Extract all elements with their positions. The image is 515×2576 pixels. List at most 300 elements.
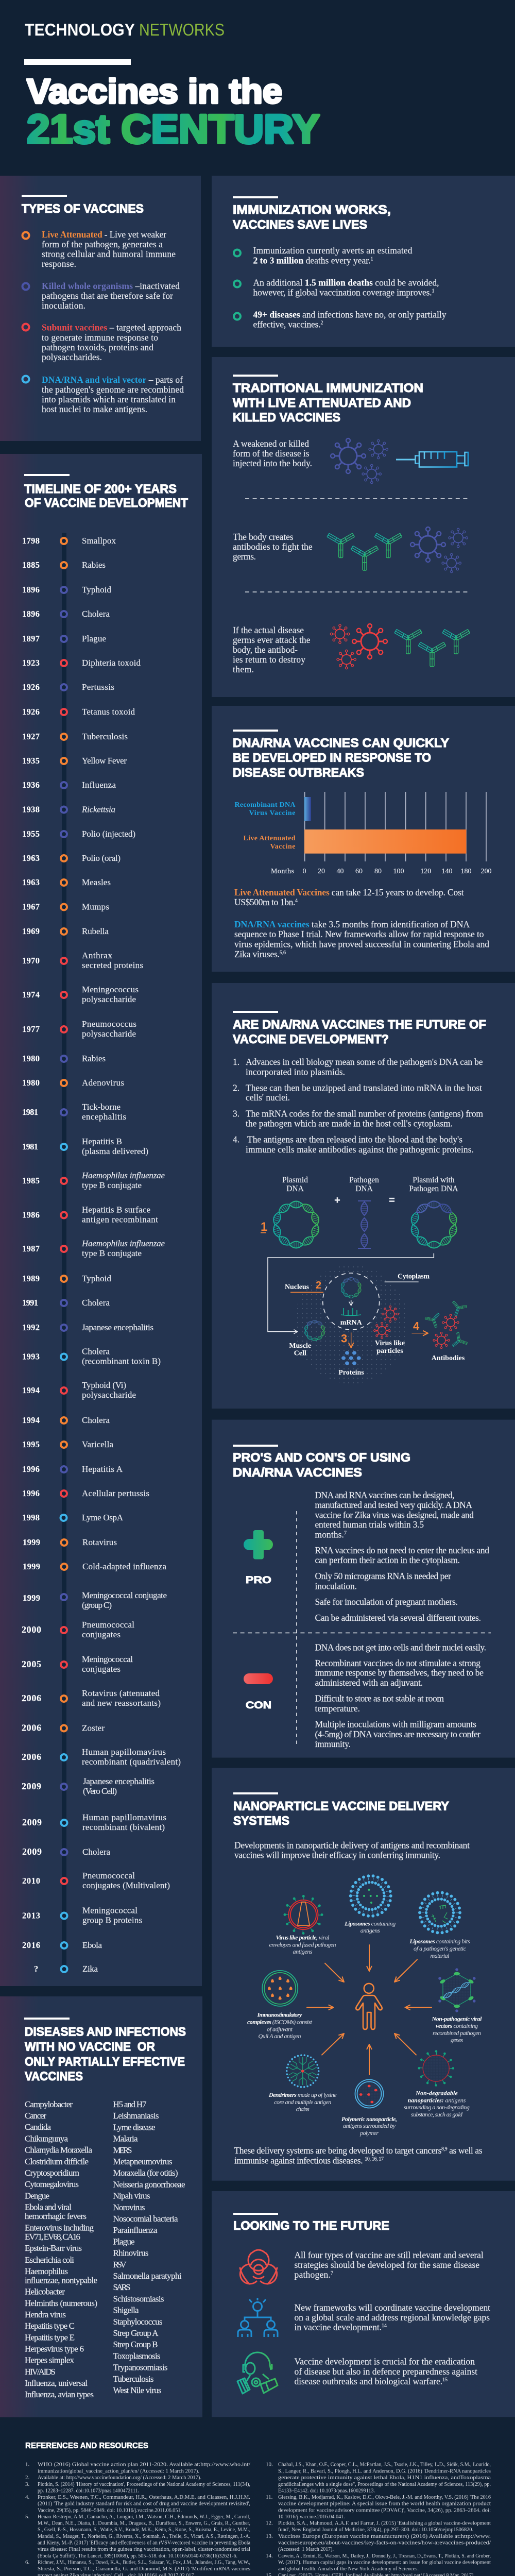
cons list: (4-5mg) of DNA vaccines are necessary to confer: [315, 1729, 480, 1739]
caption: non-degradable: [404, 2090, 470, 2118]
row zika: [34, 1964, 98, 1974]
references: left column: Henao-Restrepo, A.M., Camacho, A., Longini, I.M., Watson, C.H., Edmunds, W.J., Egger, M., Carroll,: [38, 2514, 250, 2520]
row 1981 tick-borne: 1981: [22, 1107, 38, 1117]
disease list: left column: Cancer: [25, 2111, 46, 2121]
disease list: right column: Plague: [113, 2236, 135, 2246]
disease list: left column: Helminths (numerous): [25, 2298, 97, 2308]
row 1970: secreted proteins: [82, 960, 143, 970]
subunit vaccines: Subunit vaccines – targeted approach: [42, 323, 181, 333]
title: [27, 72, 320, 151]
bar labels: Virus Vaccine: [249, 809, 296, 817]
horizontal divider: [233, 1632, 491, 1633]
axis labels: 80: [374, 868, 382, 875]
divider 1: [245, 498, 470, 499]
pros list: vaccine for Zika virus was designed, made and: [315, 1510, 474, 1520]
row 2010: Pneumococcal: [82, 1871, 135, 1880]
row 2009 hpv: [22, 1812, 166, 1832]
row 1980 rabies: [22, 1054, 106, 1063]
row 1955: Polio (injected): [82, 829, 135, 839]
references: left column: Plotkin, S. (2014) 'History of vaccination', Proceedings of the National Academy of Sciences, 111(34),: [38, 2481, 250, 2487]
row 1980 adenovirus: Adenovirus: [82, 1078, 124, 1088]
diagram: plasmid with pathogen dna: Plasmid with: [413, 1176, 455, 1184]
disease list: left column: EV71, EV68, CA16: [25, 2232, 80, 2242]
row 1897: 1897: [22, 634, 40, 643]
row 1955: [22, 829, 135, 839]
dna rna and viral vector: into plasmids which are translated in: [42, 394, 176, 404]
references: right column: vaccine development pipeline: A special issue from the world health organization product: [278, 2501, 491, 2507]
caption: iscom: Immunostimulatory: [256, 2011, 302, 2019]
row 1923: Diphteria toxoid: [82, 658, 141, 668]
row 1926 pertussis: 1926: [22, 682, 40, 692]
intro text: Developments in nanoparticle delivery of antigens and recombinant: [234, 1840, 470, 1851]
row 1986: 1986: [22, 1210, 40, 1220]
antibodies binding viruses: [424, 1299, 470, 1362]
fact: lives saved: Immunization currently averts an estimated: [253, 245, 413, 256]
heading: diseases: WITH NO VACCINE OR: [25, 2040, 155, 2054]
axis labels: 180: [460, 868, 472, 875]
row 2005: conjugates: [82, 1664, 121, 1674]
row 1991: 1991: [22, 1298, 38, 1308]
row 1992: [22, 1323, 153, 1332]
title: 21st CENTURY: [27, 106, 320, 151]
caption: liposome genetic: Liposomes containing bits: [409, 1938, 470, 1945]
references: right column: Plotkin, S.A., Mahmoud, A.A.F. and Farrar, J. (2015) 'Estalishing a global vaccine-development: [278, 2520, 491, 2527]
row 1996 pertussis: [22, 1488, 149, 1498]
diagram: plasmid dna: Plasmid: [282, 1176, 308, 1184]
diagram: plasmid dna: [272, 1176, 320, 1248]
text: vaccine development crucial: of disease but also in defence preparedness against: [295, 2366, 477, 2377]
references: right column: Chahal, J.S., Khan, O.F., Cooper, C.L., McPartlan, J.S., Tsosie, J.K., Tilley, L.D., Sidik, S.M., Lourido,: [278, 2462, 491, 2468]
diagram: plasmid with pathogen dna: [409, 1176, 458, 1248]
row 1970: 1970: [22, 956, 40, 965]
bar labels: Live Attenuated: [243, 835, 296, 842]
caption: polymeric nanoparticle: antigens surrounded by: [343, 2122, 396, 2129]
row 1970: Anthrax: [82, 951, 112, 960]
numbered steps: the pathogen which are made in the host cell's cytoplasm.: [246, 1118, 453, 1129]
row 2013: 2013: [22, 1910, 40, 1921]
row 1998: [22, 1513, 124, 1522]
row 1987: 1987: [22, 1244, 40, 1253]
closing text: 8,9: [441, 2146, 448, 2152]
references: right column: development for vaccine advisory committee (PDVAC)', Vaccine, 34(26), pp. 2863–2864. doi:: [278, 2507, 491, 2514]
arrows to person: [307, 1945, 432, 2075]
diagram: pathogen dna: Pathogen: [349, 1176, 379, 1184]
references heading: REFERENCES AND RESOURCES: [25, 2442, 148, 2450]
numbered steps: The antigens are then released into the blood and the body's: [247, 1134, 462, 1145]
row 2006 hpv: 2006: [22, 1752, 41, 1762]
references: left column: and Kieny, M.-P. (2017) 'Efficacy and effectiveness of an rVSV-vectored vaccine in preventing Ebola: [38, 2540, 250, 2546]
heading: nanoparticle: NANOPARTICLE VACCINE DELIVERY: [233, 1799, 449, 1813]
numbered steps: immune cells make antibodies against the pathogenic proteins.: [246, 1144, 474, 1155]
disease list: left column: Escherichia coli: [25, 2255, 74, 2265]
heading: diseases: DISEASES AND INFECTIONS: [25, 2025, 186, 2039]
disease list: right column: Staphylococcus: [113, 2317, 163, 2327]
row 1994 typhoid: 1994: [22, 1385, 40, 1395]
row 1927: Tuberculosis: [82, 732, 128, 741]
row 1998: 1998: [22, 1513, 40, 1522]
heading: pros and cons: [233, 1451, 410, 1480]
row 1969: [22, 926, 109, 936]
arrow: injection path: [268, 1253, 434, 1332]
text: new frameworks: [295, 2302, 490, 2332]
text: all four types: 7: [331, 2270, 333, 2276]
row 1967: [22, 902, 109, 912]
pros list: 7: [344, 1531, 347, 1536]
text: vaccine development crucial: disease outbreaks and biological warfare.: [295, 2376, 442, 2386]
row 1987: [22, 1239, 165, 1258]
references: left column: M.W., Dean, N.E., Diatta, I., Doumbia, M., Draguez, B., Duraffour, S., Enwere, G., Grais, R., Gunther,: [38, 2520, 250, 2527]
caption: polymeric nanoparticle: [341, 2115, 397, 2137]
text: new frameworks: on a global scale and address regional knowledge gaps: [295, 2312, 490, 2323]
step 2 text: [233, 532, 313, 562]
row 2000: conjugates: [82, 1630, 121, 1639]
row 1981 tick-borne: encephalitis: [82, 1112, 126, 1122]
disease list: right column: H5 and H7: [113, 2099, 147, 2109]
plus sign: +: [334, 1195, 340, 1206]
icon: weakened viruses: [331, 438, 388, 484]
row 2006 zoster: [22, 1723, 105, 1733]
cons list: Difficult to store as not stable at room: [315, 1693, 444, 1704]
row zika: Zika: [82, 1964, 98, 1974]
row 1798: [22, 536, 116, 546]
row 2000: Pneumococcal: [82, 1620, 134, 1630]
references: right column: S., Langer, R., Bavari, S., Ploegh, H.L. and Anderson, D.G. (2016) 'Dendrimer-RNA nanoparticles: [278, 2468, 491, 2475]
row 2006 zoster: Zoster: [82, 1723, 105, 1733]
numbered steps: 4.: [233, 1134, 239, 1145]
axis labels: 0: [303, 868, 306, 875]
numbered steps: 1.: [233, 1057, 239, 1067]
closing text: [234, 2145, 483, 2165]
row 1999 meningococcal: [23, 1590, 167, 1610]
icon: virus like particle: [285, 1896, 322, 1933]
subunit vaccines: polysaccharides.: [42, 352, 102, 362]
row 2009 hpv: Human papillomavirus: [82, 1812, 166, 1822]
row 1967: 1967: [22, 902, 40, 912]
row 1969: Rubella: [82, 926, 109, 936]
step 3 text: body, the antibod-: [233, 645, 298, 655]
pros list: Only 50 micrograms RNA is needed per: [315, 1571, 451, 1581]
references: left column: virus disease: Final results from the guinea ring vaccination, open-label, cluster-randomised trial: [38, 2546, 250, 2552]
step 3 and arrow: 3: [341, 1332, 347, 1345]
caption: liposome genetic: material: [431, 1952, 450, 1959]
numbered steps: These can then be unzipped and translated into mRNA in the host: [246, 1083, 482, 1093]
references: left column: Pronker, E.S., Weenen, T.C., Commandeur, H.R., Osterhaus, A.D.M.E. and Claassen, H.J.H.M.: [38, 2494, 250, 2500]
row 2005: 2005: [22, 1659, 41, 1669]
text: vaccine development crucial: 15: [442, 2377, 448, 2383]
row 1885: 1885: [22, 560, 40, 570]
step 3 text: ies return to destroy: [233, 654, 305, 665]
heading: future: [233, 1018, 486, 1046]
muscle cell dots: [294, 1265, 408, 1384]
row 1963 measles: [22, 877, 111, 887]
disease list: left column: Campylobacter: [25, 2099, 73, 2109]
disease list: right column: Schistosomiasis: [113, 2294, 164, 2303]
row 1896 typhoid: Typhoid: [82, 585, 111, 595]
cons list: immune response by themselves, they need to be: [315, 1668, 484, 1678]
disease list: left column: Chlamydia Moraxella: [25, 2145, 92, 2155]
row 1927: [22, 732, 128, 741]
row 1981 tick-borne: [22, 1102, 126, 1122]
row 1897: [22, 634, 106, 643]
proteins: Proteins: [338, 1369, 364, 1377]
row 1981 hepatitis b: Hepatitis B: [82, 1137, 122, 1146]
row 1923: 1923: [22, 658, 40, 668]
caption: iscom: Quil A and antigen: [259, 2032, 301, 2040]
row 1935: 1935: [22, 756, 40, 766]
caption: viral vector: vectors containing: [436, 2022, 478, 2029]
text: new frameworks: New frameworks will coordinate vaccine development: [295, 2302, 490, 2313]
disease list: left column: Herpesvirus type 6: [25, 2344, 84, 2354]
heading: nanoparticle: SYSTEMS: [233, 1814, 289, 1828]
heading: timeline: OF VACCINE DEVELOPMENT: [25, 496, 188, 510]
con icon: CON: [246, 1700, 271, 1711]
row 1963 measles: Measles: [82, 877, 111, 887]
heading: pros and cons: PRO'S AND CON'S OF USING: [233, 1451, 410, 1465]
axis labels: 140: [442, 868, 452, 875]
row 1994 typhoid: polysaccharide: [82, 1390, 136, 1400]
numbered steps: incorporated into plasmids.: [246, 1067, 345, 1077]
intro text: vaccines will improve their efficacy in conferring immunity.: [234, 1850, 440, 1860]
row 1996 hepatitis a: [22, 1464, 123, 1474]
row 2013: Meningococcal: [82, 1905, 138, 1916]
fact: additional deaths avoided: [234, 277, 439, 298]
text: dna rna development: [234, 919, 489, 959]
references: right column: [266, 2462, 491, 2576]
icon: iscom: [262, 1971, 298, 2006]
disease list: left column: Herpes simplex: [25, 2355, 74, 2365]
references: left column: (2011) 'The gold industry standard for risk and cost of drug and vaccine development revisited',: [38, 2501, 250, 2507]
row 1999 meningococcal: Meningococcal conjugate: [82, 1590, 167, 1600]
row 2010: conjugates (Multivalent): [82, 1880, 170, 1890]
text: new frameworks: 14: [382, 2323, 387, 2329]
row 1926 pertussis: Pertussis: [82, 682, 114, 692]
pros list: Can be administered via several different routes.: [315, 1613, 481, 1623]
text: dna rna development: DNA/RNA vaccines take 3.5 months from identification of DNA: [234, 919, 470, 929]
row 1963 polio: 1963: [22, 853, 40, 863]
references: right column: 14.: [266, 2553, 273, 2559]
references: right column: gondiichallenges with a single dose", Proceedings of the National Academy of Sciences, 113(29), pp.: [278, 2481, 491, 2487]
panel: nanoparticle delivery systems: [212, 1768, 515, 2181]
references: left column: WHO (2016) Global vaccine action plan 2011-2020. Available at:http://www.who.int/: [38, 2462, 251, 2468]
references: left column: Shresta, S., Pierson, T.C., Ciaramella, G. and Diamond, M.S. (2017) 'Modified mRNA vaccines: [38, 2566, 250, 2572]
axis labels: Months: [271, 868, 294, 875]
axis labels: 100: [393, 868, 404, 875]
row 1967: Mumps: [82, 902, 109, 912]
text: all four types: [295, 2250, 484, 2280]
row 2009 hpv: recombinant (bivalent): [82, 1822, 165, 1832]
row 1977: [22, 1019, 136, 1039]
disease list: right column: Nipah virus: [113, 2191, 150, 2201]
row 1974: polysaccharide: [82, 994, 136, 1004]
disease list: right column: Leishmaniasis: [113, 2111, 159, 2121]
text: live attenuated development: Live Attenuated Vaccines can take 12-15 years to develop. Cost: [234, 887, 464, 897]
cytoplasm label: Cytoplasm: [398, 1273, 430, 1281]
heading: traditional immunization: TRADITIONAL IMMUNIZATION: [233, 381, 423, 395]
pro icon: [244, 1530, 273, 1586]
row 2006 rotavirus: 2006: [22, 1693, 41, 1703]
disease list: left column: [25, 2099, 97, 2399]
text: dna rna development: sequence to Phase I trial. New frameworks allow for rapid response to: [234, 929, 484, 939]
timeline axis: [62, 533, 66, 1973]
row zika: ?: [34, 1964, 38, 1974]
axis labels: 200: [481, 868, 491, 875]
row 1981 tick-borne: Tick-borne: [82, 1102, 121, 1112]
disease list: right column: West Nile virus: [113, 2385, 162, 2395]
row 1981 hepatitis b: [22, 1137, 148, 1156]
row 1999 rotavirus: [23, 1537, 117, 1547]
step 4 and arrow: 4: [413, 1320, 420, 1333]
heading: traditional immunization: KILLED VACCINES: [233, 411, 340, 425]
row 2016: [22, 1940, 102, 1950]
live attenuated: response.: [42, 259, 76, 269]
pros list: RNA vaccines do not need to enter the nucleus and: [315, 1545, 489, 1555]
fact: 49+ diseases: 2: [320, 320, 323, 326]
row 1985: [22, 1171, 165, 1190]
row 1980 adenovirus: [22, 1078, 124, 1088]
disease list: left column: Candida: [25, 2122, 51, 2132]
cons list: temperature.: [315, 1703, 360, 1714]
row 1926 tetanus: Tetanus toxoid: [82, 707, 135, 717]
row 1926 pertussis: [22, 682, 114, 692]
caption: liposome genetic: of a pathogen's genetic: [414, 1945, 467, 1952]
pros list: months.: [315, 1530, 344, 1540]
disease list: left column: Influenza, universal: [25, 2378, 88, 2388]
row 1798: Smallpox: [82, 536, 116, 546]
caption: non-degradable: surrounding a non-degrading: [404, 2104, 470, 2111]
disease list: left column: Chikungunya: [25, 2133, 68, 2143]
cons list: DNA does not get into cells and their nuclei easily.: [315, 1642, 486, 1653]
row 1989: Typhoid: [82, 1274, 111, 1283]
dna rna and viral vector: DNA/RNA and viral vector – parts of: [42, 375, 183, 385]
heading: future: VACCINE DEVELOPMENT?: [233, 1032, 389, 1046]
dna rna and viral vector: host nuclei to make antigens.: [42, 404, 147, 414]
references: right column: Cawein, A., Emini, E., Watson, M., Dailey, J., Donnelly, J., Tresnan, D.,Evans, T., Plotkin, S. and Gruber,: [278, 2553, 491, 2559]
bar chart: months to develop: [235, 792, 491, 875]
heading: traditional immunization: WITH LIVE ATTENUATED AND: [233, 396, 411, 410]
con icon: [244, 1673, 273, 1711]
row 2006 rotavirus: Rotavirus (attenuated: [82, 1688, 160, 1698]
disease list: left column: Epstein-Barr virus: [25, 2243, 82, 2253]
row 1999 meningococcal: 1999: [23, 1593, 40, 1603]
references: right column: 10.: [266, 2462, 273, 2468]
row 2009 japanese encephalitis: Japanese encephalitis: [83, 1776, 154, 1786]
icon: syringe: [396, 452, 468, 467]
axis labels: 120: [420, 868, 431, 875]
row 2006 rotavirus: and new reassortants): [82, 1698, 161, 1708]
step 3 text: them.: [233, 664, 254, 674]
step 1 text: A weakened or killed: [233, 438, 309, 449]
pros list: DNA and RNA vaccines can be designed,: [315, 1490, 454, 1500]
references: right column: W. (2017). Human capital gaps in vaccine development: an issue for global vaccine development: [278, 2560, 491, 2566]
subunit vaccines: [23, 323, 181, 362]
row 1995: Varicella: [82, 1439, 113, 1449]
pros list: inoculation.: [315, 1581, 357, 1591]
heading: diseases: ONLY PARTIALLY EFFECTIVE: [25, 2055, 185, 2069]
panel: timeline: [0, 454, 202, 1986]
disease list: left column: Hepatitis type E: [25, 2333, 75, 2343]
row 1963 polio: [22, 853, 121, 863]
live attenuated: [23, 229, 176, 269]
heading: diseases: [25, 2025, 186, 2083]
panel: looking to the future: [212, 2191, 515, 2417]
row 1955: 1955: [22, 829, 40, 839]
logo: Technology Networks: [25, 20, 225, 39]
caption: liposome antigens: [344, 1920, 396, 1934]
row 1996 pertussis: Acellular pertussis: [82, 1488, 149, 1498]
fact: 49+ diseases: effective, vaccines.: [253, 319, 321, 330]
row 1970: [22, 951, 143, 970]
row 1935: [22, 756, 127, 766]
icon: antibodies: [327, 533, 402, 570]
disease list: right column: Strep Group B: [113, 2340, 158, 2349]
cons list: Multiple inoculations with milligram amounts: [315, 1719, 476, 1730]
references: right column: E4133–E4142. doi: 10.1073/pnas.1600299113.: [278, 2488, 375, 2494]
row 1986: [22, 1205, 158, 1224]
fact: additional deaths avoided: An additional 1.5 million deaths could be avoided,: [253, 277, 439, 287]
cons list: Recombinant vaccines do not stimulate a strong: [315, 1658, 480, 1668]
bar labels: Recombinant DNA: [235, 801, 296, 809]
caption: virus like particle: antigens: [293, 1948, 313, 1955]
icon: polymeric nanoparticle: [355, 2079, 383, 2108]
references: left column: pp. 12283–12287. doi:10.1073/pnas.1400472111.: [38, 2488, 139, 2494]
disease list: right column: Shigella: [113, 2306, 139, 2315]
row 1993: (recombinant toxin B): [82, 1356, 161, 1366]
step 1 text: injected into the body.: [233, 458, 312, 468]
caption: virus like particle: envelopes and fused pathogen: [269, 1941, 336, 1948]
disease list: right column: Rhinovirus: [113, 2248, 148, 2258]
caption: non-degradable: Non-degradable: [415, 2090, 458, 2097]
numbered steps: The mRNA codes for the small number of proteins (antigens) from: [246, 1109, 483, 1119]
row 2013: [22, 1905, 142, 1925]
bar labels: [235, 801, 296, 851]
row 1991: Cholera: [82, 1298, 110, 1308]
step 3 text: [233, 625, 311, 674]
disease list: left column: Clostridium difficile: [25, 2157, 89, 2166]
virus like particles: particles: [376, 1347, 403, 1355]
row 1993: [22, 1347, 161, 1366]
live attenuated: strong cellular and humoral immune: [42, 249, 176, 259]
disease list: left column: Hepatitis type C: [25, 2321, 75, 2331]
antibodies binding viruses: Antibodies: [432, 1354, 465, 1362]
killed whole organisms: pathogens that are therefore safe for: [42, 291, 173, 301]
row 2005: Meningococcal: [82, 1654, 133, 1664]
axis labels: 40: [337, 868, 344, 875]
disease list: right column: RSV: [113, 2260, 127, 2269]
pros list: Safe for inoculation of pregnant mothers.: [315, 1597, 458, 1607]
muscle cell: Cell: [294, 1350, 306, 1358]
references: left column: 3.: [25, 2481, 30, 2487]
references: right column: and global health. Annals of the New York Academy of Sciences.: [278, 2566, 419, 2572]
axis labels: [271, 868, 491, 875]
disease list: left column: Cytomegalovirus: [25, 2179, 79, 2189]
pros list: manufactured and tested very quickly. A DNA: [315, 1500, 472, 1510]
references: left column: (Ebola Ça Suffit!)', The Lancet, 389(10068), pp. 505–518. doi: 10.1016/s0140-6736(16)32621-6.: [38, 2553, 237, 2559]
step 1 text: form of the disease is: [233, 448, 310, 459]
muscle cell: [289, 1320, 325, 1358]
heading: pros and cons: DNA/RNA VACCINES: [233, 1466, 362, 1480]
numbered steps: 2.: [233, 1083, 239, 1093]
panel: pros and cons: [212, 1420, 515, 1758]
row 2009 cholera: 2009: [22, 1846, 42, 1857]
icon: liposome with antigens: [351, 1876, 391, 1916]
row 1981 hepatitis b: 1981: [22, 1142, 38, 1151]
numbered steps: 3.: [233, 1109, 239, 1119]
pro icon: PRO: [246, 1575, 271, 1586]
bar: live attenuated vaccine: [304, 829, 467, 854]
disease list: right column: Tuberculosis: [113, 2374, 153, 2384]
equals sign: =: [389, 1195, 395, 1206]
row 1986: antigen recombinant: [82, 1215, 158, 1224]
